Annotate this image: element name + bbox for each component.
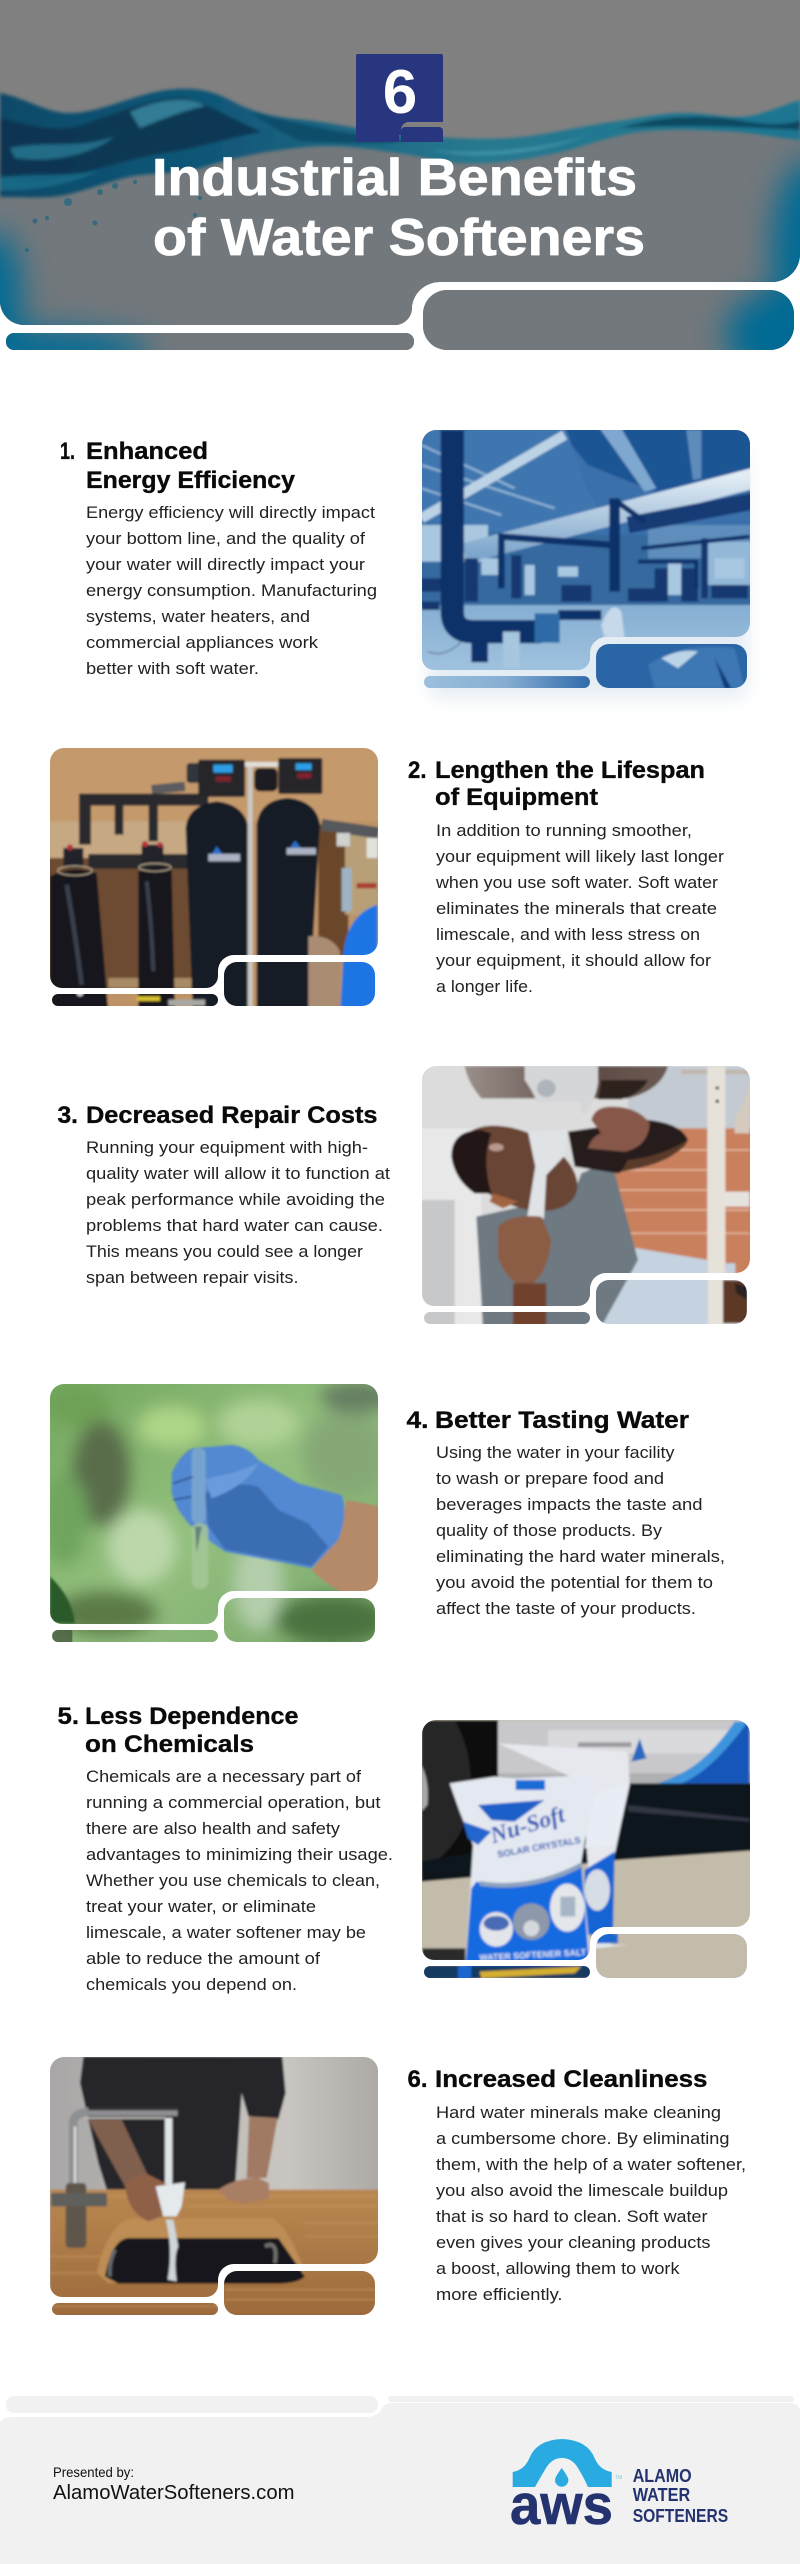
heading: decreased repair costs: 3.	[58, 1102, 78, 1129]
body text: them, with the help of a water softener,	[436, 2155, 746, 2174]
heading: increased cleanliness: Increased Cleanliness	[435, 2066, 708, 2093]
body text: In addition to running smoother,	[436, 821, 692, 840]
panel: benefit 5	[58, 1703, 760, 1994]
body text: Running your equipment with high-	[86, 1138, 368, 1157]
icon: arch with water drop	[513, 2439, 612, 2487]
card shadow	[428, 450, 748, 698]
panel: benefit 1	[60, 425, 760, 698]
wave band	[0, 89, 800, 197]
heading: less dependence on chemicals: 5.	[58, 1703, 79, 1730]
body text	[435, 821, 724, 996]
heading: decreased repair costs: Decreased Repair Costs	[86, 1102, 378, 1129]
photo: hands rinsing glass at sink	[45, 2050, 390, 2320]
title: of Water Softeners	[153, 209, 645, 267]
body text	[86, 1767, 393, 1994]
body text: you avoid the potential for them to	[436, 1573, 713, 1592]
body text: quality of those products. By	[436, 1521, 663, 1540]
body text: even gives your cleaning products	[436, 2233, 710, 2252]
body text	[436, 2103, 746, 2304]
body text: that is so hard to clean. Soft water	[436, 2207, 708, 2226]
body text: peak performance while avoiding the	[86, 1190, 385, 1209]
body text	[436, 1443, 725, 1618]
logo: alamo water softeners: TM	[615, 2475, 622, 2481]
heading: lengthen the lifespan of equipment: of Equipment	[435, 784, 598, 811]
body text: a longer life.	[436, 977, 533, 996]
body text: Chemicals are a necessary part of	[86, 1767, 361, 1786]
body text: more efficiently.	[436, 2285, 562, 2304]
number badge: 6	[383, 58, 417, 127]
body text: problems that hard water can cause.	[86, 1216, 383, 1235]
logo: alamo water softeners: SOFTENERS	[633, 2506, 728, 2526]
heading: better tasting water: Better Tasting Water	[435, 1407, 689, 1434]
presented by text: AlamoWaterSofteners.com	[53, 2481, 294, 2504]
photo: gloved hand with test tube	[50, 1384, 378, 1642]
footer panel	[0, 2396, 800, 2564]
body text: Hard water minerals make cleaning	[436, 2103, 721, 2122]
footer	[0, 2396, 800, 2564]
body text: your water will directly impact your	[86, 555, 365, 574]
photo: salt bags by van: SOLAR CRYSTALS	[497, 1835, 582, 1860]
heading: lengthen the lifespan of equipment: Lengthen the Lifespan	[435, 757, 705, 784]
panel: benefit 4	[50, 1384, 724, 1642]
logo: alamo water softeners: aws	[510, 2473, 613, 2537]
body text: a boost, allowing them to work	[436, 2259, 680, 2278]
body text: running a commercial operation, but	[86, 1793, 381, 1812]
heading: enhanced energy efficiency: 1.	[60, 438, 75, 465]
body text: to wash or prepare food and	[436, 1469, 664, 1488]
body text: better with soft water.	[86, 659, 259, 678]
logo: alamo water softeners: ALAMO	[633, 2466, 692, 2486]
heading: better tasting water: 4.	[406, 1407, 428, 1434]
body text: your equipment will likely last longer	[436, 847, 724, 866]
photo: salt bags by van: Nu-Soft	[486, 1801, 569, 1849]
panel: benefit 2	[45, 745, 724, 1015]
title	[152, 149, 645, 267]
body text: Using the water in your facility	[436, 1443, 675, 1462]
body text: Energy efficiency will directly impact	[86, 503, 375, 522]
body text: This means you could see a longer	[86, 1242, 363, 1261]
header banner	[0, 0, 800, 383]
body text: energy consumption. Manufacturing	[86, 581, 377, 600]
body text: treat your water, or eliminate	[86, 1897, 316, 1916]
body text: able to reduce the amount of	[86, 1949, 320, 1968]
body text: limescale, and with less stress on	[436, 925, 700, 944]
heading: less dependence on chemicals	[58, 1703, 298, 1758]
body text: your equipment, it should allow for	[436, 951, 711, 970]
body text: there are also health and safety	[86, 1819, 341, 1838]
heading: enhanced energy efficiency: Energy Efficiency	[86, 467, 296, 494]
photo: salt bags by van: WATER SOFTENER SALT	[479, 1947, 587, 1963]
photo: salt bags by van	[415, 1715, 760, 1985]
heading: increased cleanliness: 6.	[408, 2066, 428, 2093]
body text	[86, 1138, 390, 1287]
presented by text	[53, 2464, 294, 2504]
body text: a cumbersome chore. By eliminating	[436, 2129, 730, 2148]
body text: your bottom line, and the quality of	[86, 529, 365, 548]
water background panel	[0, 0, 800, 383]
body text: systems, water heaters, and	[86, 607, 310, 626]
heading: lengthen the lifespan of equipment: 2.	[408, 757, 426, 784]
photo: softener tanks	[45, 745, 390, 1015]
body text: when you use soft water. Soft water	[435, 873, 718, 892]
title: Industrial Benefits	[152, 149, 637, 207]
panel: benefit 3	[58, 1060, 760, 1330]
heading: less dependence on chemicals: on Chemicals	[85, 1731, 254, 1758]
body text: eliminating the hard water minerals,	[436, 1547, 725, 1566]
body text: Whether you use chemicals to clean,	[86, 1871, 380, 1890]
presented by text: Presented by:	[53, 2464, 134, 2480]
body text: affect the taste of your products.	[436, 1599, 696, 1618]
logo: alamo water softeners	[510, 2439, 728, 2537]
heading: enhanced energy efficiency: Enhanced	[86, 438, 208, 465]
bubbles	[25, 180, 202, 252]
vignette glows	[0, 160, 800, 383]
body text: commercial appliances work	[86, 633, 319, 652]
body text: chemicals you depend on.	[86, 1975, 297, 1994]
body text: limescale, a water softener may be	[86, 1923, 366, 1942]
body text: advantages to minimizing their usage.	[86, 1845, 393, 1864]
body text: eliminates the minerals that create	[436, 899, 717, 918]
heading: lengthen the lifespan of equipment	[408, 757, 705, 811]
body text	[86, 503, 377, 678]
body text: span between repair visits.	[86, 1268, 298, 1287]
photo: industrial pipes in blue	[415, 425, 760, 695]
heading: enhanced energy efficiency	[60, 438, 296, 494]
body text: quality water will allow it to function at	[86, 1164, 390, 1183]
logo: alamo water softeners: WATER	[633, 2485, 690, 2505]
body text: beverages impacts the taste and	[436, 1495, 702, 1514]
photo: plumber with wrench	[415, 1060, 760, 1330]
body text: you also avoid the limescale buildup	[436, 2181, 728, 2200]
number badge	[356, 54, 443, 142]
panel: benefit 6	[45, 2050, 746, 2320]
heading: less dependence on chemicals: Less Dependence	[85, 1703, 298, 1730]
